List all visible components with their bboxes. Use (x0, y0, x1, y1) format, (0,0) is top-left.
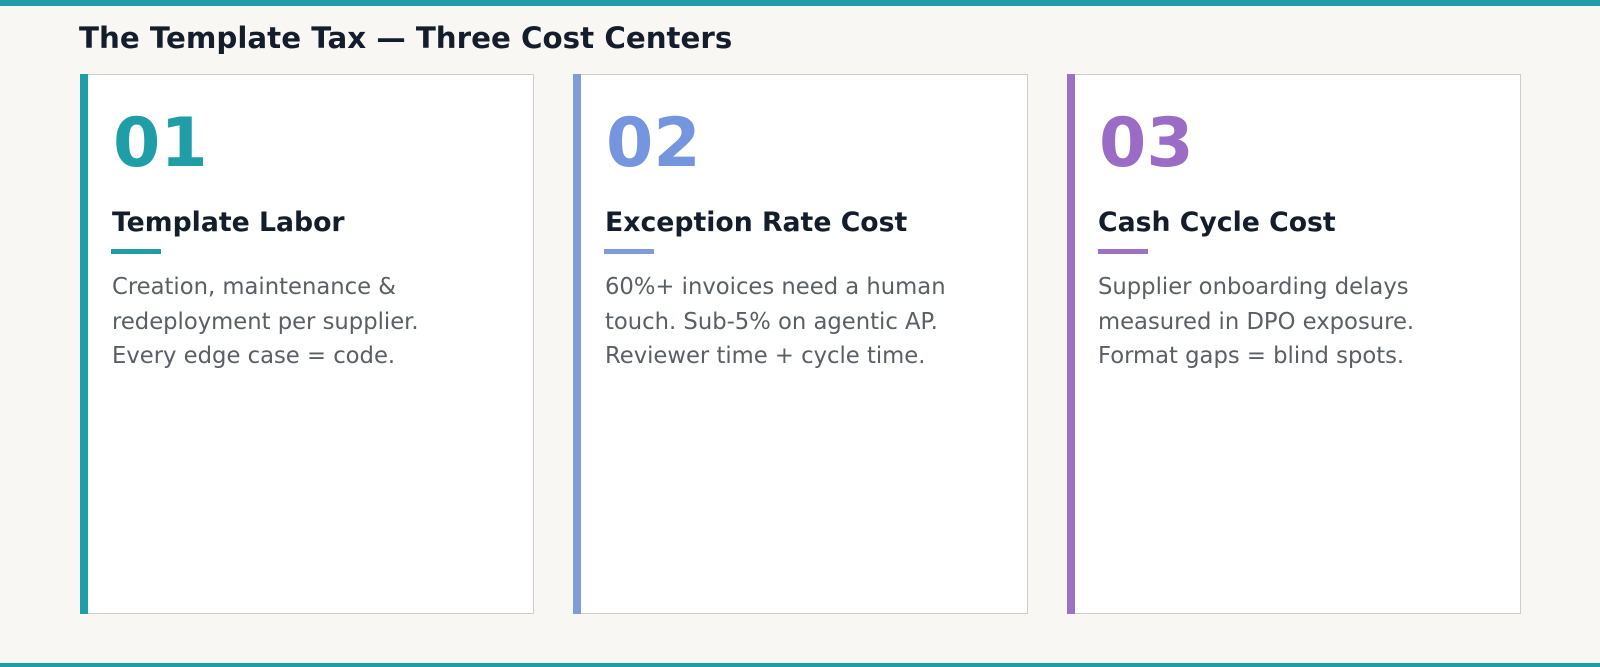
text: exception rate description: Reviewer time + cycle time. (605, 343, 925, 369)
number 01: 01 (113, 104, 208, 183)
text: cash cycle description: Format gaps = blind spots. (1098, 343, 1404, 369)
text: exception rate description (605, 274, 946, 369)
text: cash cycle description: Supplier onboarding delays (1098, 274, 1409, 300)
heading underline (1098, 249, 1148, 254)
text: template labor description: redeployment per supplier. (112, 308, 419, 334)
panel accent stripe (80, 74, 88, 614)
text: exception rate description: 60%+ invoices need a human (605, 274, 946, 300)
heading: exception rate cost: Exception Rate Cost (605, 207, 907, 238)
bottom accent bar (0, 663, 1600, 667)
number 03: 03 (1099, 104, 1194, 183)
text: template labor description: Creation, maintenance & (112, 274, 396, 300)
text: template labor description: Every edge case = code. (112, 343, 395, 369)
text: exception rate description: touch. Sub-5% on agentic AP. (605, 308, 938, 334)
panel accent stripe (573, 74, 581, 614)
panel: template labor (80, 74, 534, 614)
number 02: 02 (606, 104, 701, 183)
heading: cash cycle cost: Cash Cycle Cost (1098, 207, 1336, 238)
panel: cash cycle cost (1067, 74, 1521, 614)
heading underline (111, 249, 161, 254)
text: cash cycle description (1098, 274, 1414, 369)
text: template labor description (112, 274, 419, 369)
title: The Template Tax — Three Cost Centers (79, 21, 732, 55)
panel accent stripe (1067, 74, 1075, 614)
heading underline (604, 249, 654, 254)
panel: exception rate cost (573, 74, 1028, 614)
text: cash cycle description: measured in DPO exposure. (1098, 308, 1414, 334)
top accent bar (0, 0, 1600, 6)
heading: template labor: Template Labor (112, 207, 345, 238)
